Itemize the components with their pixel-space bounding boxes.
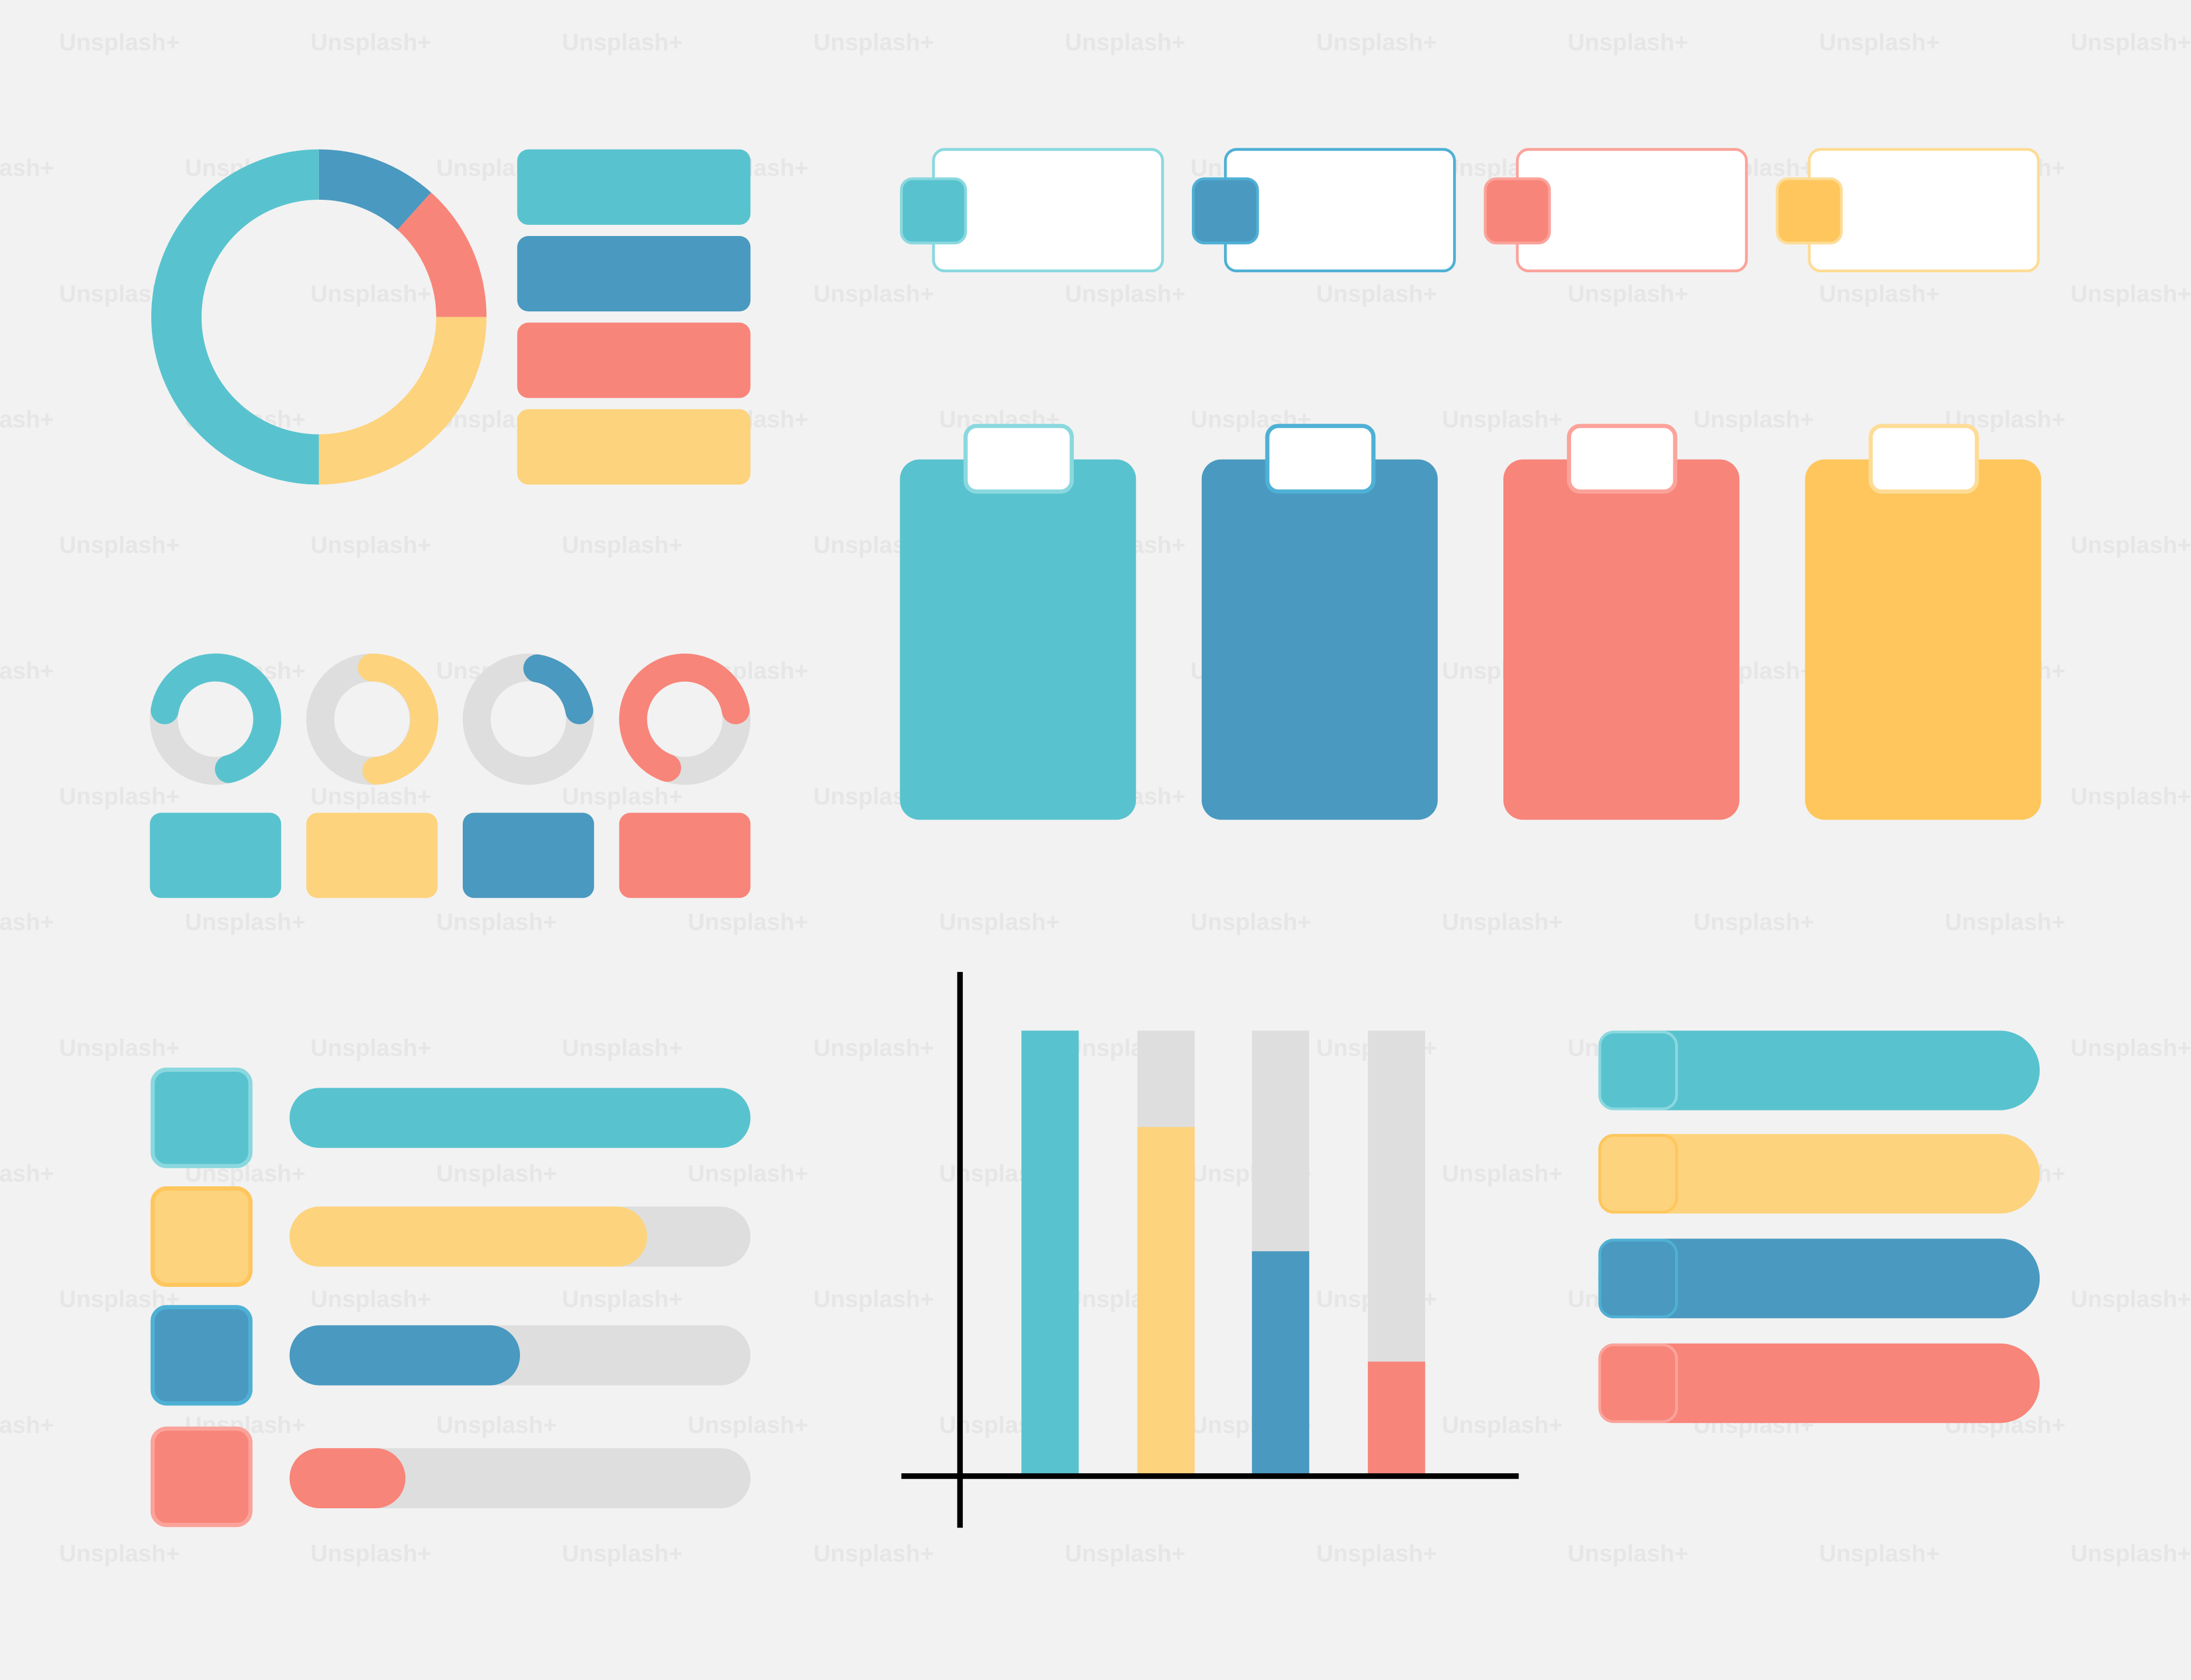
text: Unsplash+	[1693, 154, 1814, 181]
text: Unsplash+	[813, 532, 934, 558]
text: Unsplash+	[1945, 154, 2065, 181]
text: Unsplash+	[1442, 1160, 1562, 1187]
text: Unsplash+	[59, 783, 180, 810]
text: Unsplash+	[310, 280, 431, 307]
legend bars	[517, 150, 750, 485]
text: Unsplash+	[1442, 154, 1562, 181]
text: Unsplash+	[1316, 532, 1437, 558]
text: Unsplash+	[562, 532, 682, 558]
text: Unsplash+	[813, 1034, 934, 1061]
text: Unsplash+	[436, 1160, 557, 1187]
text: Unsplash+	[2071, 1286, 2191, 1313]
text: Unsplash+	[1065, 783, 1185, 810]
text: Unsplash+	[310, 783, 431, 810]
text: Unsplash+	[1191, 154, 1311, 181]
text: Unsplash+	[562, 29, 682, 55]
text: Unsplash+	[185, 1160, 306, 1187]
text: Unsplash+	[1693, 908, 1814, 935]
text: Unsplash+	[1693, 1411, 1814, 1438]
text: Unsplash+	[688, 406, 808, 433]
text: Unsplash+	[1819, 280, 1940, 307]
text: Unsplash+	[1568, 783, 1689, 810]
text: Unsplash+	[1316, 1286, 1437, 1313]
text: Unsplash+	[1819, 532, 1940, 558]
text: Unsplash+	[185, 154, 306, 181]
text: Unsplash+	[1316, 280, 1437, 307]
text: Unsplash+	[310, 532, 431, 558]
progress rings	[164, 668, 737, 771]
text: Unsplash+	[1065, 29, 1185, 55]
text: Unsplash+	[1316, 1034, 1437, 1061]
text: Unsplash+	[436, 657, 557, 684]
text: Unsplash+	[1819, 29, 1940, 55]
text: Unsplash+	[562, 280, 682, 307]
text: Unsplash+	[2071, 29, 2191, 55]
text: Unsplash+	[1819, 1034, 1940, 1061]
text: Unsplash+	[185, 406, 306, 433]
text: Unsplash+	[436, 154, 557, 181]
text: Unsplash+	[1065, 532, 1185, 558]
text: Unsplash+	[59, 280, 180, 307]
text: Unsplash+	[59, 1540, 180, 1567]
text: Unsplash+	[688, 1411, 808, 1438]
text: Unsplash+	[59, 29, 180, 55]
text: Unsplash+	[1442, 908, 1562, 935]
text: Unsplash+	[1568, 532, 1689, 558]
text: Unsplash+	[1945, 657, 2065, 684]
text: Unsplash+	[1819, 783, 1940, 810]
text: Unsplash+	[1191, 908, 1311, 935]
text: Unsplash+	[1065, 1540, 1185, 1567]
text: Unsplash+	[813, 1286, 934, 1313]
text: Unsplash+	[562, 1286, 682, 1313]
text: Unsplash+	[1065, 1286, 1185, 1313]
text: Unsplash+	[939, 406, 1060, 433]
text: Unsplash+	[310, 1540, 431, 1567]
text: Unsplash+	[939, 1160, 1060, 1187]
text: Unsplash+	[1945, 1160, 2065, 1187]
pill bars	[1599, 1030, 2040, 1423]
text: Unsplash+	[688, 657, 808, 684]
text: Unsplash+	[2071, 783, 2191, 810]
text: Unsplash+	[185, 657, 306, 684]
donut chart	[176, 175, 462, 460]
text: Unsplash+	[1316, 29, 1437, 55]
text: Unsplash+	[1693, 657, 1814, 684]
text: Unsplash+	[813, 1540, 934, 1567]
text: Unsplash+	[2071, 1540, 2191, 1567]
text: Unsplash+	[939, 154, 1060, 181]
text: Unsplash+	[562, 1540, 682, 1567]
text: Unsplash+	[436, 1411, 557, 1438]
text: Unsplash+	[1442, 406, 1562, 433]
text: Unsplash+	[436, 406, 557, 433]
text: Unsplash+	[688, 154, 808, 181]
text: Unsplash+	[1191, 657, 1311, 684]
text: Unsplash+	[1945, 908, 2065, 935]
text: Unsplash+	[1945, 406, 2065, 433]
clipboards	[900, 426, 2041, 820]
text: Unsplash+	[1065, 280, 1185, 307]
text: Unsplash+	[2071, 1034, 2191, 1061]
text: Unsplash+	[1568, 29, 1689, 55]
text: Unsplash+	[2071, 280, 2191, 307]
text: Unsplash+	[562, 1034, 682, 1061]
text: Unsplash+	[185, 908, 306, 935]
text: Unsplash+	[1065, 1034, 1185, 1061]
text: Unsplash+	[939, 1411, 1060, 1438]
text: Unsplash+	[1693, 1160, 1814, 1187]
text: Unsplash+	[2071, 532, 2191, 558]
top label boxes	[902, 150, 2039, 271]
text: Unsplash+	[1819, 1286, 1940, 1313]
text: Unsplash+	[1316, 783, 1437, 810]
text: Unsplash+	[939, 657, 1060, 684]
text: Unsplash+	[1945, 1411, 2065, 1438]
text: Unsplash+	[939, 908, 1060, 935]
text: Unsplash+	[562, 783, 682, 810]
text: Unsplash+	[813, 29, 934, 55]
text: Unsplash+	[1191, 1160, 1311, 1187]
text: Unsplash+	[59, 532, 180, 558]
text: Unsplash+	[1442, 1411, 1562, 1438]
text: Unsplash+	[1191, 406, 1311, 433]
text: Unsplash+	[688, 908, 808, 935]
text: Unsplash+	[688, 1160, 808, 1187]
text: Unsplash+	[1442, 657, 1562, 684]
text: Unsplash+	[1819, 1540, 1940, 1567]
text: Unsplash+	[59, 1034, 180, 1061]
text: Unsplash+	[1568, 280, 1689, 307]
bar chart	[902, 972, 1519, 1528]
text: Unsplash+	[1568, 1286, 1689, 1313]
text: Unsplash+	[1568, 1540, 1689, 1567]
text: Unsplash+	[310, 29, 431, 55]
text: Unsplash+	[59, 1286, 180, 1313]
text: Unsplash+	[1316, 1540, 1437, 1567]
text: Unsplash+	[310, 1034, 431, 1061]
ring labels	[150, 813, 750, 898]
text: Unsplash+	[310, 1286, 431, 1313]
text: Unsplash+	[436, 908, 557, 935]
text: Unsplash+	[813, 783, 934, 810]
progress bar list	[152, 1070, 750, 1525]
text: Unsplash+	[185, 1411, 306, 1438]
text: Unsplash+	[1191, 1411, 1311, 1438]
text: Unsplash+	[1693, 406, 1814, 433]
text: Unsplash+	[1568, 1034, 1689, 1061]
text: Unsplash+	[813, 280, 934, 307]
